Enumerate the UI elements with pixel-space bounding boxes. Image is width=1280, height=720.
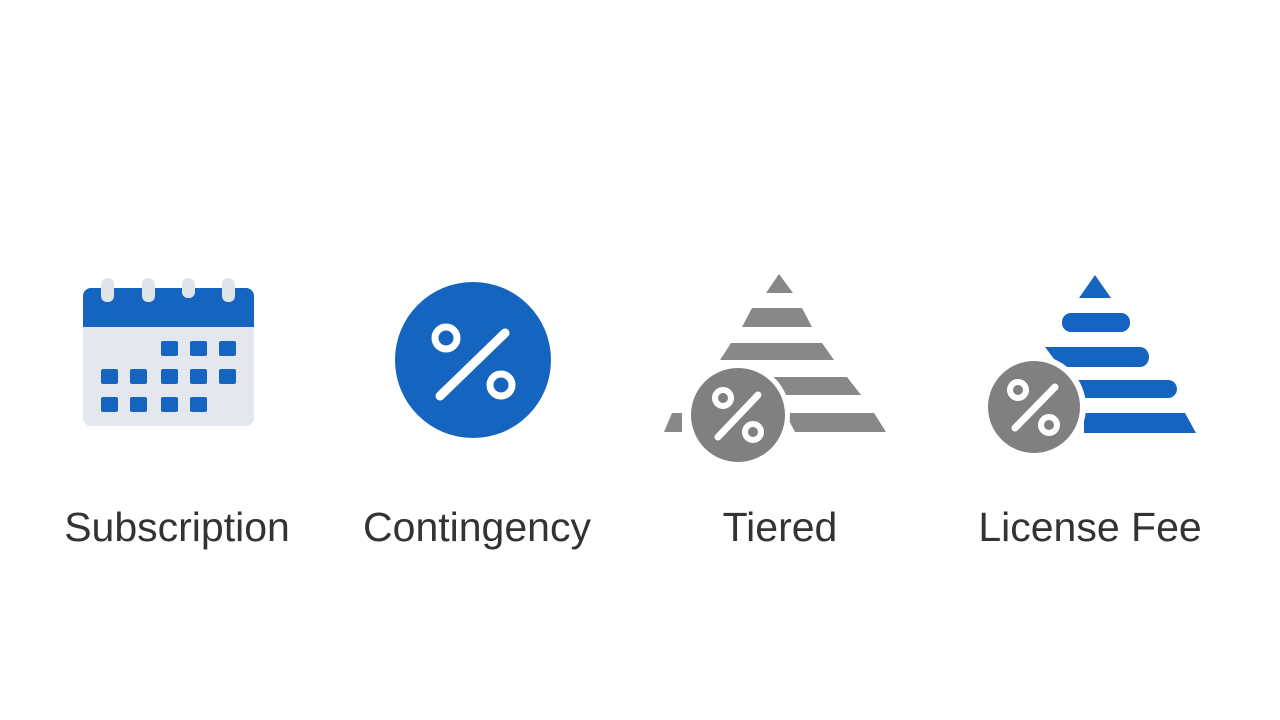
icon: license fee pyramid [982, 275, 1196, 459]
icon: percent circle [395, 282, 551, 438]
label: Contingency: Contingency [363, 504, 591, 550]
icon: calendar [83, 278, 254, 426]
label: Subscription: Subscription [64, 504, 290, 550]
label: License Fee: License Fee [978, 504, 1202, 550]
icon: tiered pyramid [664, 274, 886, 467]
label: Tiered: Tiered [723, 504, 837, 550]
